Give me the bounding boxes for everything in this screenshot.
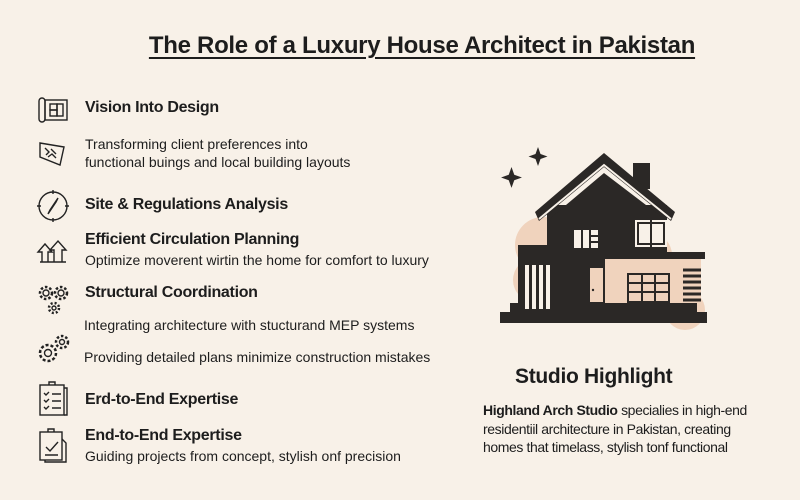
heading: studio highlight: Studio Highlight xyxy=(515,365,672,388)
icon: plan xyxy=(39,142,65,166)
icon: checklist xyxy=(39,381,68,416)
text: studio description xyxy=(483,402,747,455)
heading: site analysis: Site & Regulations Analysis xyxy=(85,196,288,213)
text: transforming: functional buings and local building layouts xyxy=(85,154,350,170)
text: studio description: homes that timelass, stylish tonf functional xyxy=(483,439,728,455)
text: transforming: Transforming client preferences into xyxy=(85,136,308,152)
heading: erd-to-end: Erd-to-End Expertise xyxy=(85,391,238,408)
heading: end-to-end: End-to-End Expertise xyxy=(85,427,242,444)
illustration: house xyxy=(500,147,707,330)
text: transforming xyxy=(85,136,350,170)
icon: compass xyxy=(37,190,69,222)
icon: gears xyxy=(38,286,68,314)
icon: gears 2 xyxy=(38,334,70,362)
heading: vision into design: Vision Into Design xyxy=(85,99,219,116)
heading: structural: Structural Coordination xyxy=(85,284,258,301)
title: The Role of a Luxury House Architect in Pakistan xyxy=(149,32,695,59)
text: optimize: Optimize moverent wirtin the home for comfort to luxury xyxy=(85,252,429,268)
text: guiding: Guiding projects from concept, stylish onf precision xyxy=(85,448,401,464)
icon: arrows xyxy=(36,240,68,263)
text: integrating: Integrating architecture with stucturand MEP systems xyxy=(84,317,414,333)
text: studio description: residentiil architecture in Pakistan, creating xyxy=(483,420,731,436)
text: studio description: Highland Arch Studio specialies in high-end xyxy=(483,402,747,418)
heading: circulation: Efficient Circulation Planning xyxy=(85,231,299,248)
text: providing: Providing detailed plans minimize construction mistakes xyxy=(84,349,430,365)
icon: document check xyxy=(39,428,67,463)
icon: blueprint xyxy=(38,97,68,123)
